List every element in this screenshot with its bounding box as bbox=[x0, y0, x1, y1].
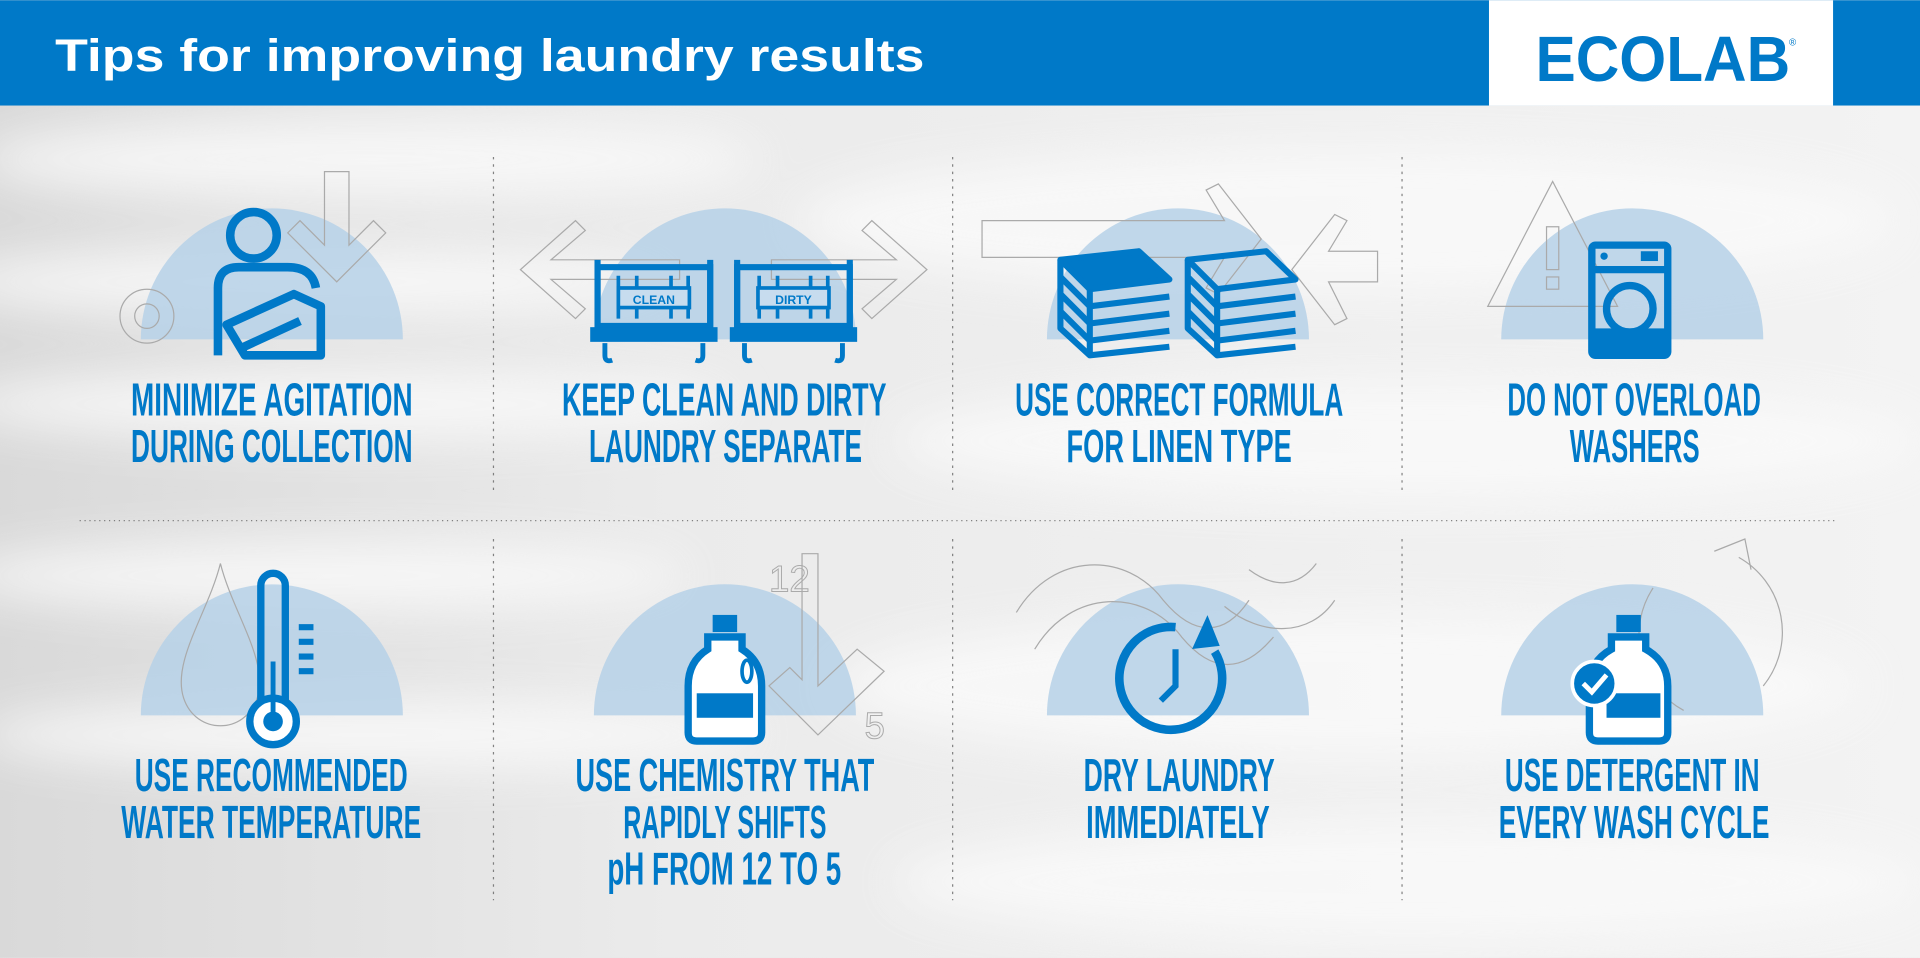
logo box: ® bbox=[1789, 38, 1797, 49]
label: keep separate: LAUNDRY SEPARATE bbox=[589, 420, 862, 472]
icon: clock bbox=[1119, 620, 1222, 730]
label: water temperature bbox=[121, 749, 421, 848]
label: keep separate: KEEP CLEAN AND DIRTY bbox=[562, 373, 887, 425]
icon: clean and dirty carts: CLEAN bbox=[633, 293, 675, 307]
label: dry immediately bbox=[1084, 749, 1275, 848]
label: correct formula: FOR LINEN TYPE bbox=[1067, 420, 1292, 472]
label: chemistry bbox=[576, 749, 874, 894]
label: detergent bbox=[1499, 749, 1769, 848]
title: Tips for improving laundry results bbox=[55, 30, 924, 81]
label: minimize agitation: MINIMIZE AGITATION bbox=[131, 373, 413, 425]
logo box bbox=[1489, 0, 1833, 106]
semicircles bbox=[141, 208, 1763, 715]
label: minimize agitation: DURING COLLECTION bbox=[131, 420, 413, 472]
faint outline icons: 12 bbox=[769, 559, 810, 600]
label: water temperature: USE RECOMMENDED bbox=[135, 749, 408, 801]
dividers bbox=[80, 157, 1837, 900]
icon: stacked linens bbox=[1060, 251, 1296, 355]
label: dry immediately: DRY LAUNDRY bbox=[1084, 749, 1275, 801]
label: do not overload bbox=[1507, 373, 1761, 472]
icon: detergent bottle with check bbox=[1572, 615, 1668, 741]
label: correct formula: USE CORRECT FORMULA bbox=[1015, 373, 1343, 425]
faint outline icons: 5 bbox=[864, 706, 885, 747]
icon: clean and dirty carts: DIRTY bbox=[775, 293, 812, 307]
labels bbox=[121, 373, 1769, 894]
label: water temperature: WATER TEMPERATURE bbox=[121, 796, 421, 848]
label: keep separate bbox=[562, 373, 887, 472]
faint outline icons bbox=[120, 172, 1782, 747]
label: chemistry: USE CHEMISTRY THAT bbox=[576, 749, 874, 801]
header bar bbox=[0, 0, 1920, 106]
label: correct formula bbox=[1015, 373, 1343, 472]
logo box: ECOLAB bbox=[1536, 24, 1790, 95]
label: chemistry: RAPIDLY SHIFTS bbox=[623, 796, 827, 848]
icon: thermometer bbox=[250, 573, 313, 745]
icon: chemistry bottle bbox=[688, 615, 762, 741]
label: chemistry: pH FROM 12 TO 5 bbox=[607, 842, 841, 894]
icon: clean and dirty carts bbox=[590, 260, 857, 361]
label: minimize agitation bbox=[131, 373, 413, 472]
label: do not overload: WASHERS bbox=[1570, 420, 1700, 472]
icon: washer bbox=[1592, 245, 1668, 355]
icon: person carrying laundry bbox=[218, 212, 321, 355]
label: dry immediately: IMMEDIATELY bbox=[1086, 796, 1270, 848]
